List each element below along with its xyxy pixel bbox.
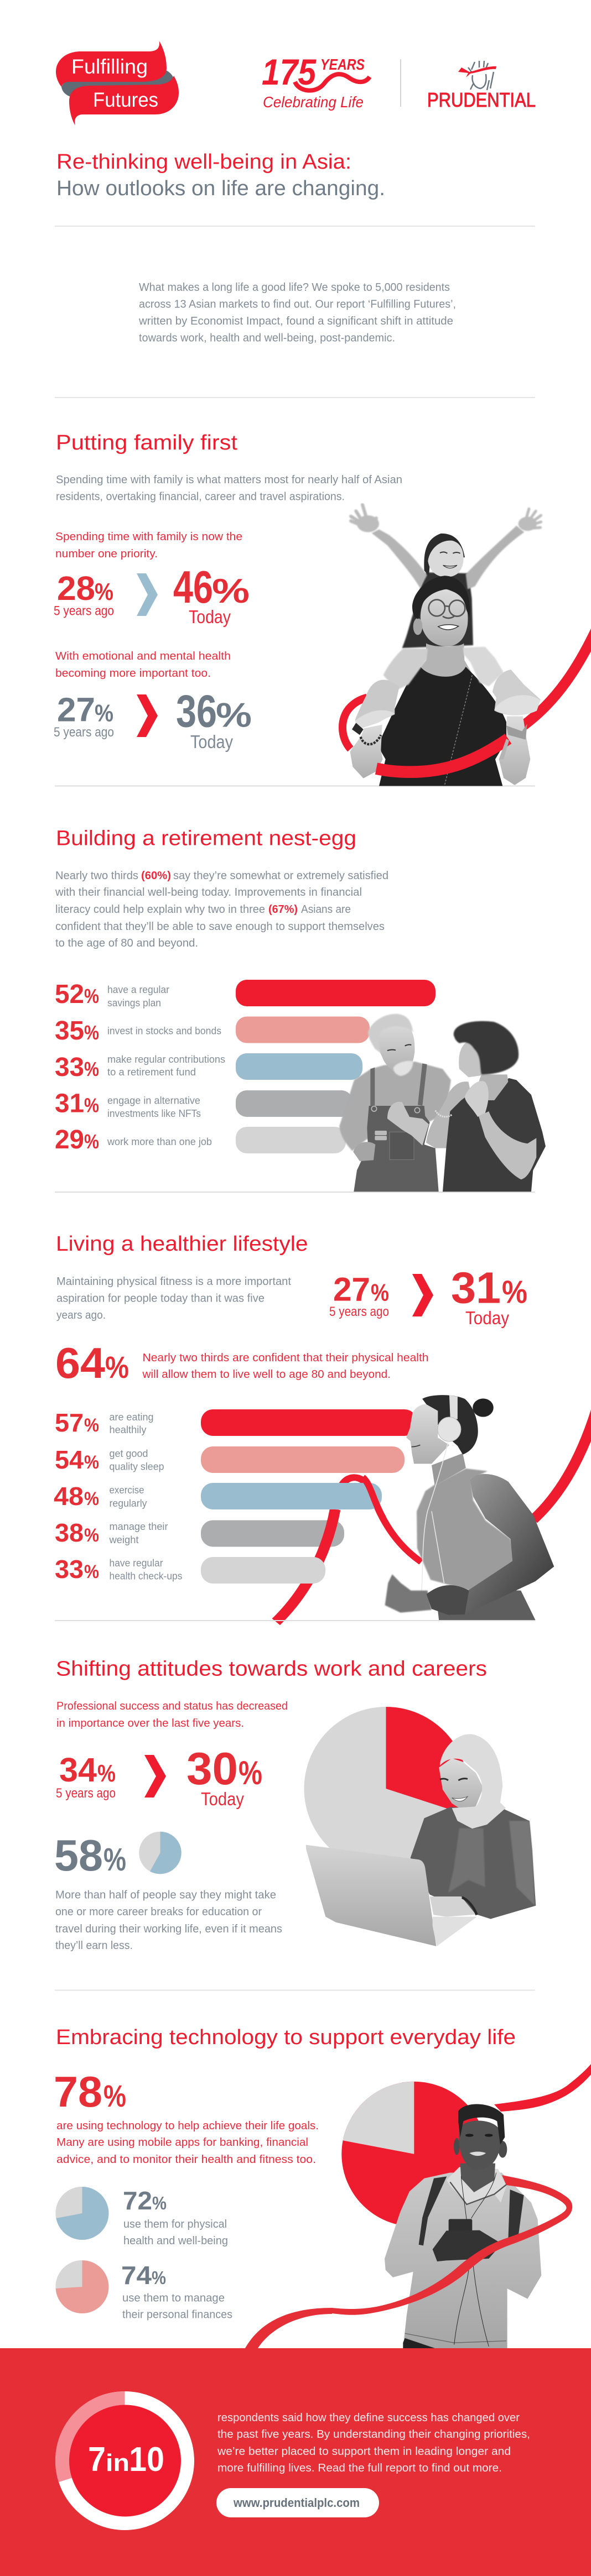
stat: 34% to 30%: 30 (186, 1743, 238, 1794)
logo: 175 years celebrating life: 175 (262, 51, 317, 92)
stat: 78%: 78 (54, 2067, 102, 2116)
stat: 27% to 31%: 5 years ago (329, 1304, 389, 1319)
stat rows: retirement: 31 (55, 1089, 84, 1119)
stat rows: retirement: to a retirement fund (107, 1066, 196, 1078)
ring chart: 7 in 10: 7 (88, 2441, 106, 2479)
stat: 72% physical health: health and well-being (123, 2235, 228, 2247)
callout: emotional and mental health: becoming more important too. (55, 667, 211, 680)
callout: number one priority (55, 531, 242, 560)
ribbon front of torso (376, 739, 508, 772)
footer text: respondents said how they define success has changed over (217, 2412, 520, 2424)
stat rows: retirement: % (84, 1130, 99, 1153)
stat: 74% personal finances: use them to manage (122, 2292, 225, 2305)
stat: 27% to 36%: 27 (57, 691, 95, 729)
paragraph: retirement (55, 870, 388, 949)
stat: 72% physical health: 72 (123, 2186, 152, 2215)
logo: 175 years celebrating life (262, 51, 370, 111)
photo: woman with laptop (306, 1734, 536, 1946)
stat: 72% physical health: use them for physical (123, 2218, 227, 2230)
footer text: we’re better placed to support them in leading longer and (217, 2446, 511, 2458)
callout: using technology: advice, and to monitor their health and fitness too. (56, 2154, 316, 2166)
stat: 78%: % (103, 2078, 126, 2113)
stat rows: health: % (84, 1488, 99, 1509)
stat rows: health: are eating (110, 1411, 154, 1423)
paragraph: fitness: aspiration for people today than it was five (56, 1293, 265, 1305)
stat rows: retirement: make regular contributions (107, 1053, 225, 1065)
stat: 28% to 46% (54, 561, 250, 627)
stat: 27% to 36%: % (216, 697, 252, 735)
panel: building a retirement nest-egg (55, 827, 546, 1193)
stat: 28% to 46%: 46 (173, 561, 213, 613)
stat: 72% physical health (123, 2186, 228, 2247)
photo: runner with headphones (385, 1395, 554, 1620)
heading: healthier lifestyle: Living a healthier lifestyle (56, 1232, 308, 1256)
bars: healthy eating, sleep, weight (201, 1409, 417, 1547)
ring chart: 7 in 10: in (106, 2449, 129, 2476)
paragraph: fitness: years ago. (56, 1309, 106, 1321)
stat rows: health: exercise (110, 1484, 144, 1496)
stat rows: retirement: engage in alternative (107, 1095, 200, 1106)
stat: 78% (54, 2067, 126, 2116)
stat rows: health: 48 (54, 1482, 84, 1511)
heading: technology: Embracing technology to support everyday life (56, 2026, 516, 2049)
stat: 27% to 31%: 31 (451, 1263, 501, 1313)
heading: putting family first: Putting family first (56, 431, 237, 454)
panel: putting family first (54, 431, 591, 786)
ribbon: runner (276, 1406, 591, 1622)
logo: Prudential: PRUDENTIAL (427, 88, 536, 111)
intro text: written by Economist Impact, found a significant shift in attitude (138, 315, 453, 327)
callout: professional success: Professional success and status has decreased (56, 1700, 288, 1712)
stat rows: retirement: 33 (55, 1053, 84, 1082)
ribbon: top right (494, 2064, 591, 2112)
stat rows: retirement (55, 980, 225, 1154)
stat: 72% physical health: % (152, 2193, 167, 2213)
photo: man with phone (385, 2104, 541, 2348)
stat rows: retirement: % (84, 1094, 99, 1117)
stat rows: health: regularly (110, 1497, 147, 1509)
heading: careers: Shifting attitudes towards work and careers (56, 1658, 487, 1681)
stat: 58%: % (103, 1842, 126, 1878)
ring chart: 7 in 10: 10 (129, 2441, 164, 2479)
bars: exercise and check-ups (201, 1483, 382, 1584)
stat rows: health (54, 1408, 183, 1584)
stat rows: health: 33 (55, 1555, 84, 1584)
callout: using technology (56, 2120, 319, 2166)
logo: Fulfilling Futures (56, 41, 179, 126)
paragraph: career breaks (55, 1889, 282, 1952)
footer text: more fulfilling lives. Read the full report to find out more. (217, 2462, 502, 2474)
paragraph: career breaks: travel during their working life, even if it means (55, 1923, 282, 1935)
logo: Prudential (427, 61, 536, 111)
stat rows: retirement: investments like NFTs (107, 1107, 201, 1119)
stat rows: health: % (84, 1561, 99, 1582)
title: How outlooks on life are changing. (56, 177, 385, 200)
paragraph: retirement: literacy could help explain why two in three (55, 903, 265, 916)
stat: 34% to 30% (56, 1743, 262, 1809)
paragraph: career breaks: they’ll earn less. (55, 1940, 133, 1952)
stat rows: retirement: invest in stocks and bonds (107, 1025, 221, 1037)
stat: 27% to 31%: % (371, 1279, 389, 1306)
intro text: What makes a long life a good life? We spoke to 5,000 residents (139, 281, 450, 294)
ribbon: to footer (245, 2308, 332, 2348)
stat: 74% personal finances: 74 (121, 2261, 152, 2290)
stat rows: health: % (84, 1525, 99, 1546)
stat rows: health: % (84, 1415, 99, 1436)
footer text (217, 2412, 530, 2474)
paragraph: retirement: (60%) (141, 870, 171, 882)
panel: embracing technology (54, 2026, 591, 2348)
stat: 28% to 46%: % (212, 572, 250, 610)
paragraph: fitness (56, 1276, 291, 1321)
paragraph: career breaks: More than half of people say they might take (55, 1889, 276, 1901)
logo: 175 years celebrating life: Celebrating Life (263, 93, 364, 111)
photo: father and child (350, 505, 541, 786)
paragraph: retirement: to the age of 80 and beyond. (55, 937, 198, 949)
stat: 27% to 36% (54, 686, 252, 752)
stat: 34% to 30%: 5 years ago (56, 1786, 116, 1801)
stat: 64% physical health: Nearly two thirds are confident that their physical health (143, 1352, 428, 1364)
ring chart: 7 in 10 (55, 2391, 194, 2530)
paragraph: fitness: Maintaining physical fitness is a more important (56, 1276, 291, 1288)
stat: 64% physical health: 64 (55, 1339, 105, 1387)
stat rows: retirement: 35 (55, 1016, 84, 1046)
stat: 74% personal finances: % (152, 2267, 166, 2288)
panel: footer (0, 2348, 591, 2576)
intro text: towards work, health and well-being, post-pandemic. (139, 332, 395, 344)
stat rows: retirement: % (84, 1058, 99, 1080)
intro text (138, 281, 456, 344)
ribbon: over exercise bar (363, 1477, 383, 1518)
logo: 175 years celebrating life: YEARS (320, 56, 365, 73)
stat rows: health: weight (109, 1534, 138, 1545)
stat: 27% to 36%: 5 years ago (54, 725, 114, 740)
paragraph: retirement: with their financial well-being today. Improvements in financial (55, 886, 362, 898)
panel: living a healthier lifestyle (54, 1232, 591, 1622)
stat: 64% physical health: % (105, 1350, 129, 1384)
stat rows: health: 57 (55, 1408, 84, 1437)
stat rows: retirement: savings plan (107, 997, 161, 1009)
stat: 34% to 30%: % (239, 1754, 262, 1791)
photo: elderly couple (339, 1014, 546, 1192)
stat rows: health: health check-ups (110, 1570, 183, 1581)
stat: 74% personal finances: their personal finances (122, 2309, 232, 2321)
callout: number one priority: Spending time with family is now the (55, 531, 242, 543)
paragraph: family: residents, overtaking financial, career and travel aspirations. (56, 491, 345, 503)
stat: 58%: 58 (54, 1831, 103, 1880)
stat rows: health: get good (110, 1448, 148, 1459)
logo: Fulfilling Futures: Fulfilling (71, 55, 148, 78)
pie: 78% (341, 2082, 486, 2227)
ribbon: across man (332, 2175, 572, 2315)
stat: 28% to 46%: % (95, 578, 113, 605)
stat: 28% to 46%: 28 (57, 569, 95, 607)
callout: using technology: Many are using mobile apps for banking, financial (56, 2136, 308, 2149)
title: Re-thinking well-being in Asia: (56, 150, 351, 174)
button: website (216, 2488, 379, 2517)
stat rows: retirement: 29 (55, 1125, 84, 1154)
stat: 27% to 31%: % (502, 1274, 527, 1310)
paragraph: retirement: Nearly two thirds (55, 870, 138, 882)
stat: 34% to 30%: % (97, 1760, 116, 1787)
stat: 28% to 46%: Today (189, 607, 231, 627)
paragraph: family (56, 474, 402, 503)
stat rows: retirement: 52 (55, 980, 84, 1009)
paragraph: retirement: confident that they’ll be able to save enough to support themselves (55, 921, 385, 933)
callout: using technology: are using technology to help achieve their life goals. (56, 2120, 319, 2132)
stat: 28% to 46%: 5 years ago (54, 604, 114, 618)
stat rows: health: healthily (110, 1424, 147, 1435)
pie: 74% (55, 2260, 108, 2313)
heading: retirement: Building a retirement nest-egg (56, 827, 356, 850)
ribbon behind father (343, 626, 591, 749)
stat rows: health: manage their (110, 1520, 168, 1532)
pie: 72% (55, 2187, 108, 2240)
stat rows: retirement: % (84, 1021, 99, 1044)
paragraph: career breaks: one or more career breaks for education or (55, 1906, 262, 1918)
header logos (56, 41, 536, 126)
intro text: across 13 Asian markets to find out. Our report ‘Fulfilling Futures’, (139, 299, 456, 311)
stat rows: retirement: work more than one job (107, 1136, 212, 1147)
stat: 64% physical health (55, 1339, 428, 1387)
footer text: the past five years. By understanding their changing priorities, (217, 2428, 530, 2441)
button: website: www.prudentialplc.com (233, 2496, 360, 2510)
panel: shifting attitudes towards work and careers (54, 1658, 536, 1990)
paragraph: retirement: say they’re somewhat or extremely satisfied (173, 870, 388, 882)
bar chart: retirement (236, 980, 436, 1153)
stat: 27% to 31% (329, 1263, 527, 1328)
stat rows: health: 38 (55, 1518, 84, 1547)
stat: 74% personal finances (121, 2261, 232, 2321)
callout: professional success (56, 1700, 288, 1729)
paragraph: retirement: Asians are (301, 903, 351, 916)
pie: 58% (139, 1832, 182, 1874)
callout: professional success: in importance over the last five years. (56, 1717, 244, 1729)
stat: 27% to 31%: 27 (333, 1271, 370, 1308)
paragraph: retirement: (67%) (268, 903, 298, 916)
stat: 27% to 31%: Today (465, 1308, 509, 1328)
stat: 27% to 36%: Today (190, 731, 233, 752)
stat rows: health: have regular (110, 1557, 163, 1569)
paragraph: family: Spending time with family is what matters most for nearly half of Asian (56, 474, 402, 486)
callout: emotional and mental health (55, 650, 231, 680)
stat rows: health: quality sleep (110, 1461, 164, 1472)
callout: emotional and mental health: With emotional and mental health (55, 650, 231, 662)
callout: number one priority: number one priority. (55, 548, 158, 560)
stat: 58% (54, 1831, 126, 1880)
pie: 30% (304, 1707, 468, 1870)
stat: 34% to 30%: 34 (59, 1751, 97, 1789)
stat: 64% physical health: will allow them to live well to age 80 and beyond. (142, 1368, 391, 1381)
title (56, 150, 385, 200)
stat rows: health: 54 (55, 1445, 84, 1474)
stat rows: health: % (84, 1452, 99, 1473)
stat: 27% to 36%: % (95, 700, 113, 727)
stat: 34% to 30%: Today (201, 1789, 244, 1809)
stat: 27% to 36%: 36 (176, 686, 217, 737)
stat rows: retirement: % (84, 985, 99, 1007)
stat rows: retirement: have a regular (107, 984, 169, 995)
logo: Fulfilling Futures: Futures (93, 88, 158, 111)
